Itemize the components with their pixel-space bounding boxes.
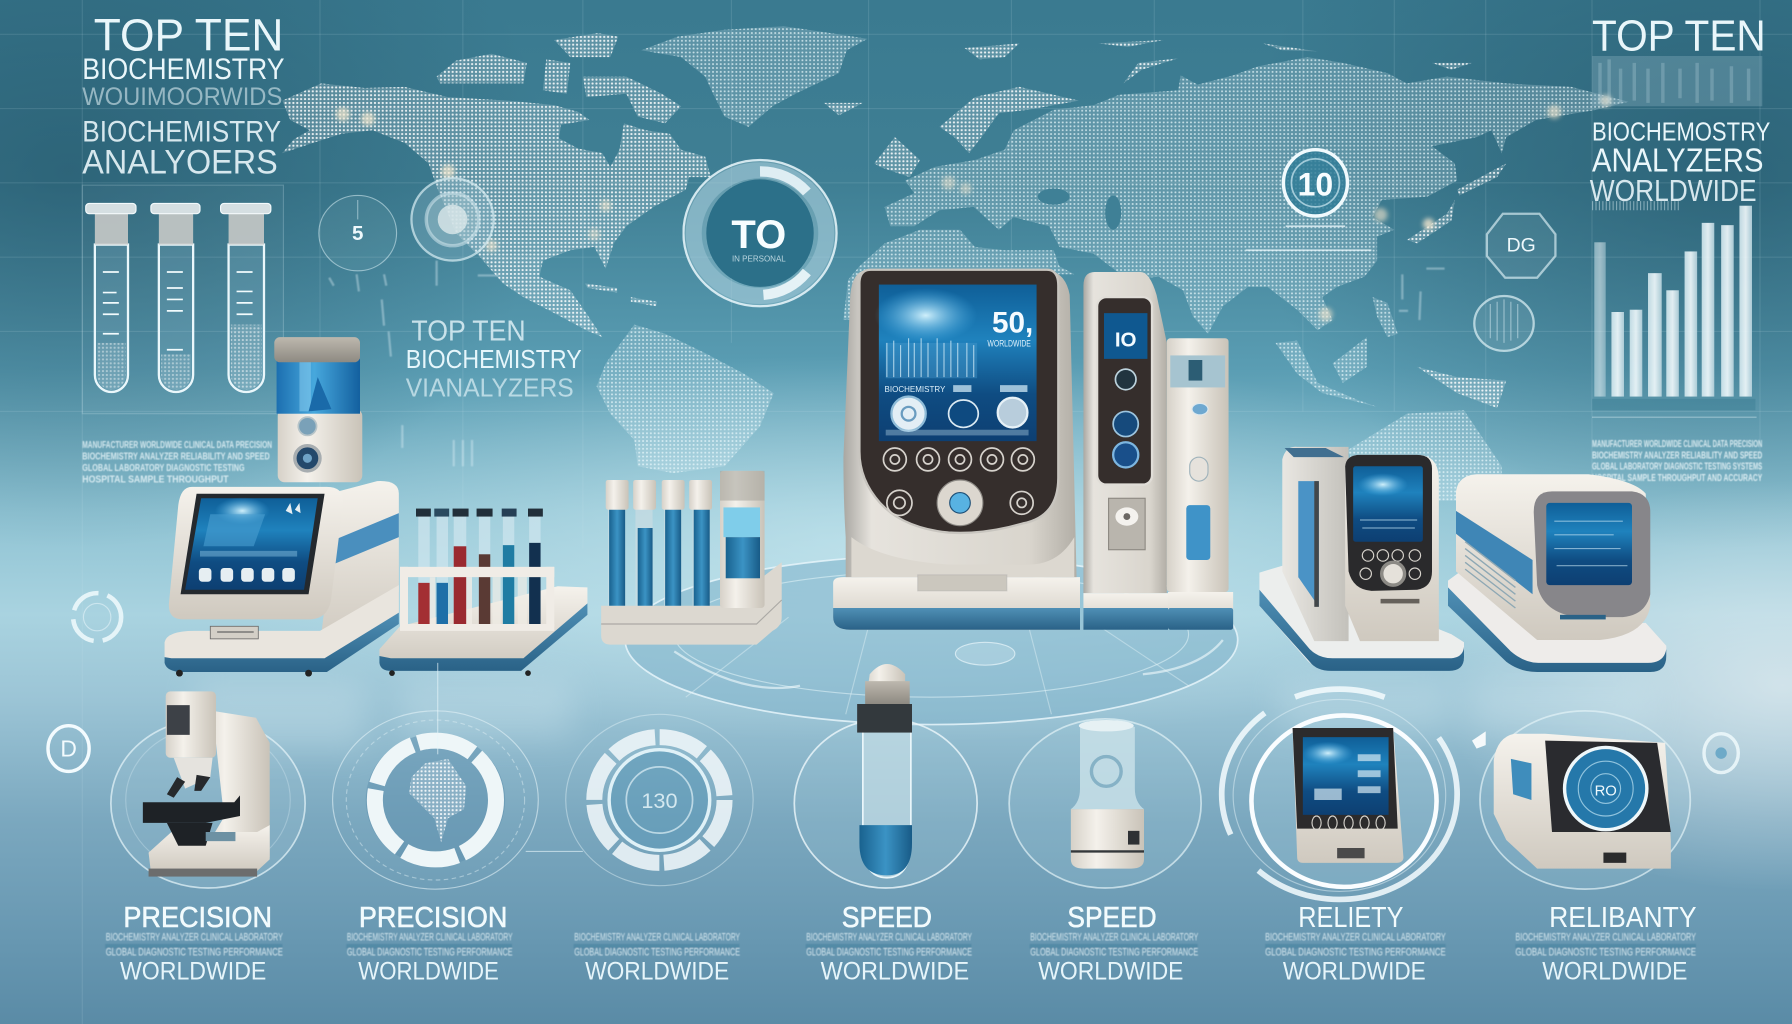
caption lines bbox=[1265, 932, 1446, 958]
caption lines bbox=[1515, 932, 1696, 958]
caption lines bbox=[574, 932, 740, 958]
caption lines: GLOBAL DIAGNOSTIC TESTING PERFORMANCE bbox=[806, 946, 972, 958]
map: Greenland bbox=[641, 26, 867, 127]
heading line: top ten: TOP TEN bbox=[94, 9, 283, 60]
ring icon: right upper bbox=[1487, 214, 1555, 278]
worldwide label: WORLDWIDE bbox=[120, 957, 266, 985]
heading line: analyzers: ANALYOERS bbox=[82, 144, 278, 182]
heading line: biochemistry second: BIOCHEMISTRY bbox=[82, 116, 281, 149]
feature circle 7: benchtop scanner bbox=[1480, 711, 1690, 889]
icon: test tube one bbox=[86, 203, 136, 392]
column label: precision 2 bbox=[346, 902, 513, 985]
feature circle 1: microscope bbox=[111, 691, 305, 888]
right paragraph block bbox=[1592, 439, 1762, 484]
map: Japan and Sakhalin bbox=[1407, 163, 1506, 243]
map: Caribbean islands bbox=[585, 283, 657, 306]
left heading block bbox=[82, 9, 285, 182]
floor reflections bbox=[194, 680, 1651, 749]
worldwide label: WORLDWIDE bbox=[358, 957, 499, 985]
left paragraph block: HOSPITAL SAMPLE THROUGHPUT bbox=[82, 474, 229, 485]
caption lines: GLOBAL DIAGNOSTIC TESTING PERFORMANCE bbox=[574, 946, 740, 958]
main touchscreen: BIOCHEMISTRY bbox=[885, 385, 946, 394]
icon: dotted globe bbox=[409, 759, 466, 842]
column label: reliety 6 bbox=[1265, 902, 1446, 985]
worldwide label: WORLDWIDE bbox=[585, 957, 729, 985]
device: left analyzer with reagent cylinder bbox=[165, 337, 399, 677]
caption lines: GLOBAL DIAGNOSTIC TESTING PERFORMANCE bbox=[1265, 946, 1446, 958]
middle column unit: IO bbox=[1115, 328, 1137, 351]
caption lines: GLOBAL DIAGNOSTIC TESTING PERFORMANCE bbox=[347, 946, 513, 958]
mid heading: top ten: TOP TEN bbox=[411, 316, 526, 348]
icon: test tube two bbox=[151, 203, 200, 392]
floor platform ring under main device bbox=[625, 555, 1238, 725]
tablet controls bbox=[1360, 550, 1421, 579]
heading line: biochemistry: BIOCHEMISTRY bbox=[82, 53, 285, 86]
caption lines bbox=[1030, 932, 1199, 958]
column label: speed 4: SPEED bbox=[842, 902, 932, 934]
ring icon with number 5: 5 bbox=[352, 222, 363, 245]
badge: 10 circle bbox=[1246, 150, 1371, 250]
mid heading: analyzers: VIANALYZERS bbox=[406, 373, 574, 403]
reagent tubes bbox=[606, 480, 712, 606]
icon: cartridge bbox=[1071, 720, 1144, 869]
left paragraph block: MANUFACTURER WORLDWIDE CLINICAL DATA PRECISION bbox=[82, 440, 272, 451]
caption lines bbox=[346, 932, 513, 958]
map: Europe and Asia bbox=[885, 57, 1629, 334]
device: main analyzer console bbox=[833, 270, 1233, 630]
right heading block bbox=[1590, 12, 1770, 208]
base plate bbox=[165, 585, 399, 670]
ring icon with globe core bbox=[411, 178, 494, 261]
map: Arctic islands bbox=[437, 33, 681, 123]
device: right tablet analyzer bbox=[1259, 447, 1464, 671]
caption lines bbox=[806, 932, 972, 958]
left paragraph block: BIOCHEMISTRY ANALYZER RELIABILITY AND SPEED bbox=[82, 451, 270, 462]
cylinder reservoir bbox=[274, 337, 362, 482]
map: Iceland bbox=[824, 103, 863, 115]
feature circle 4: sample vial bbox=[794, 664, 977, 888]
tablet analyzer side face bbox=[1282, 447, 1349, 641]
map: Australia bbox=[1347, 410, 1502, 501]
map: Malaysia and Sumatra bbox=[1275, 341, 1377, 407]
ring icon with number 5 bbox=[319, 195, 397, 271]
blurred strip beneath title bbox=[1592, 56, 1762, 106]
main dial bbox=[937, 480, 983, 526]
glowing city lights on the map bbox=[336, 95, 1611, 321]
icon: scanner device: RO bbox=[1595, 783, 1617, 799]
device: right benchtop analyzer bbox=[1448, 474, 1666, 672]
caption lines bbox=[105, 932, 283, 958]
main touchscreen bbox=[874, 285, 1037, 441]
tablet dial bbox=[1382, 562, 1405, 585]
right column unit bbox=[1167, 338, 1233, 630]
map: Africa bbox=[843, 230, 1074, 320]
caption lines: GLOBAL DIAGNOSTIC TESTING PERFORMANCE bbox=[1515, 946, 1696, 958]
map: Philippines bbox=[1373, 297, 1398, 337]
map: New Guinea bbox=[1417, 367, 1506, 408]
mid heading: biochemistry: BIOCHEMISTRY bbox=[406, 344, 582, 374]
caption lines: BIOCHEMISTRY ANALYZER CLINICAL LABORATORY bbox=[106, 932, 283, 944]
caption lines: BIOCHEMISTRY ANALYZER CLINICAL LABORATORY bbox=[1030, 932, 1199, 944]
small ring icon: D: D bbox=[60, 736, 77, 762]
icon: scanner device bbox=[1494, 734, 1671, 869]
tablet analyzer front bbox=[1345, 455, 1439, 641]
badge: 10 circle: 10 bbox=[1298, 166, 1333, 202]
middle column unit bbox=[1083, 272, 1168, 630]
analyzer body bbox=[320, 481, 399, 646]
benchtop base bbox=[1448, 571, 1666, 672]
worldwide label: WORLDWIDE bbox=[1542, 957, 1687, 985]
column label: speed 5: SPEED bbox=[1067, 902, 1157, 934]
rack frame bbox=[400, 567, 554, 631]
column label: reliability 7: RELIBANTY bbox=[1549, 902, 1697, 934]
caption lines: BIOCHEMISTRY ANALYZER CLINICAL LABORATORY bbox=[1265, 932, 1446, 944]
map: South America bbox=[597, 325, 774, 473]
left paragraph block bbox=[82, 440, 272, 485]
right heading: worldwide: WORLDWIDE bbox=[1590, 173, 1757, 208]
caption lines: GLOBAL DIAGNOSTIC TESTING PERFORMANCE bbox=[1030, 946, 1199, 958]
column label: worldwide 3 bbox=[574, 932, 740, 985]
reagent base bbox=[601, 562, 782, 645]
column label: precision 1: PRECISION bbox=[123, 902, 272, 934]
feature circle 3: radial dial bbox=[526, 714, 753, 886]
feature circle 2: globe ring bbox=[333, 663, 538, 889]
map: Caspian Sea cut bbox=[1105, 195, 1121, 230]
feature circle 5: cartridge bbox=[1009, 719, 1201, 888]
icon: vial bbox=[857, 664, 912, 878]
bezel buttons bbox=[883, 448, 1034, 515]
badge: TO circle: TO bbox=[731, 213, 786, 257]
icon: microscope bbox=[143, 691, 270, 877]
map: North America bbox=[282, 83, 711, 337]
column label: reliety 6: RELIETY bbox=[1298, 902, 1403, 934]
column label: precision 1 bbox=[105, 902, 283, 985]
map: Britain bbox=[874, 137, 920, 177]
right heading: top ten: TOP TEN bbox=[1592, 12, 1766, 60]
mid heading block bbox=[406, 316, 582, 403]
map: Arctic fragments bbox=[965, 40, 1472, 83]
main touchscreen: 50, bbox=[992, 307, 1033, 340]
icon: test tube three bbox=[221, 203, 271, 392]
caption lines: BIOCHEMISTRY ANALYZER CLINICAL LABORATORY bbox=[574, 932, 740, 944]
reagent case bbox=[720, 471, 765, 608]
feature circle 6: glowing tablet bbox=[1222, 689, 1457, 899]
main touchscreen: WORLDWIDE bbox=[987, 338, 1031, 348]
main base plate bbox=[833, 577, 1080, 630]
column label: precision 2: PRECISION bbox=[359, 902, 507, 934]
screen icons bbox=[199, 503, 301, 582]
faint holographic streaks bbox=[329, 261, 1445, 466]
benchtop bezel bbox=[1534, 491, 1650, 617]
caption lines: GLOBAL DIAGNOSTIC TESTING PERFORMANCE bbox=[106, 946, 283, 958]
right heading: analyzers: ANALYZERS bbox=[1592, 142, 1763, 179]
map: Borneo bbox=[1333, 337, 1367, 383]
icon: tablet device bbox=[1293, 728, 1403, 863]
badge: TO circle bbox=[683, 160, 837, 306]
worldwide label: WORLDWIDE bbox=[1283, 957, 1426, 985]
benchtop body bbox=[1456, 474, 1650, 640]
bar chart bbox=[1592, 206, 1757, 417]
small ring icon: left bbox=[73, 593, 121, 641]
touchscreen bezel bbox=[169, 487, 343, 619]
heading line: worldwide garbled: WOUIMOORWIDS bbox=[82, 83, 282, 111]
small ring icon: right bbox=[1704, 734, 1738, 773]
left paragraph block: GLOBAL LABORATORY DIAGNOSTIC TESTING bbox=[82, 463, 245, 474]
feature circle 3: radial dial: 130 bbox=[641, 788, 678, 813]
worldwide label: WORLDWIDE bbox=[1038, 957, 1183, 985]
column label: speed 4 bbox=[806, 902, 972, 985]
map: Black Sea cut bbox=[1038, 189, 1070, 205]
white speck bbox=[1472, 731, 1486, 749]
column label: speed 5 bbox=[1030, 902, 1199, 985]
rack platform bbox=[379, 586, 587, 665]
badge: TO circle: IN PERSONAL bbox=[732, 255, 786, 264]
dark bezel bbox=[859, 270, 1058, 533]
map: Scandinavia bbox=[939, 87, 1079, 153]
caption lines: BIOCHEMISTRY ANALYZER CLINICAL LABORATORY bbox=[806, 932, 972, 944]
world map made of dots bbox=[282, 26, 1629, 501]
ring icon: right lower bbox=[1474, 296, 1534, 351]
device: test tube rack bbox=[379, 509, 587, 676]
caption lines: BIOCHEMISTRY ANALYZER CLINICAL LABORATORY bbox=[1515, 932, 1696, 944]
tablet analyzer base bbox=[1259, 566, 1464, 670]
main body shell bbox=[843, 270, 1077, 577]
device: reagent tube block bbox=[601, 471, 782, 645]
panel: three test tubes bbox=[82, 185, 283, 414]
caption lines: BIOCHEMISTRY ANALYZER CLINICAL LABORATORY bbox=[347, 932, 513, 944]
small ring icon: D bbox=[48, 726, 89, 771]
worldwide label: WORLDWIDE bbox=[821, 957, 969, 985]
sample tubes bbox=[416, 509, 543, 624]
column label: reliability 7 bbox=[1515, 902, 1697, 985]
ring icon: right upper: DG bbox=[1507, 234, 1536, 256]
chart bars bbox=[1594, 206, 1752, 397]
